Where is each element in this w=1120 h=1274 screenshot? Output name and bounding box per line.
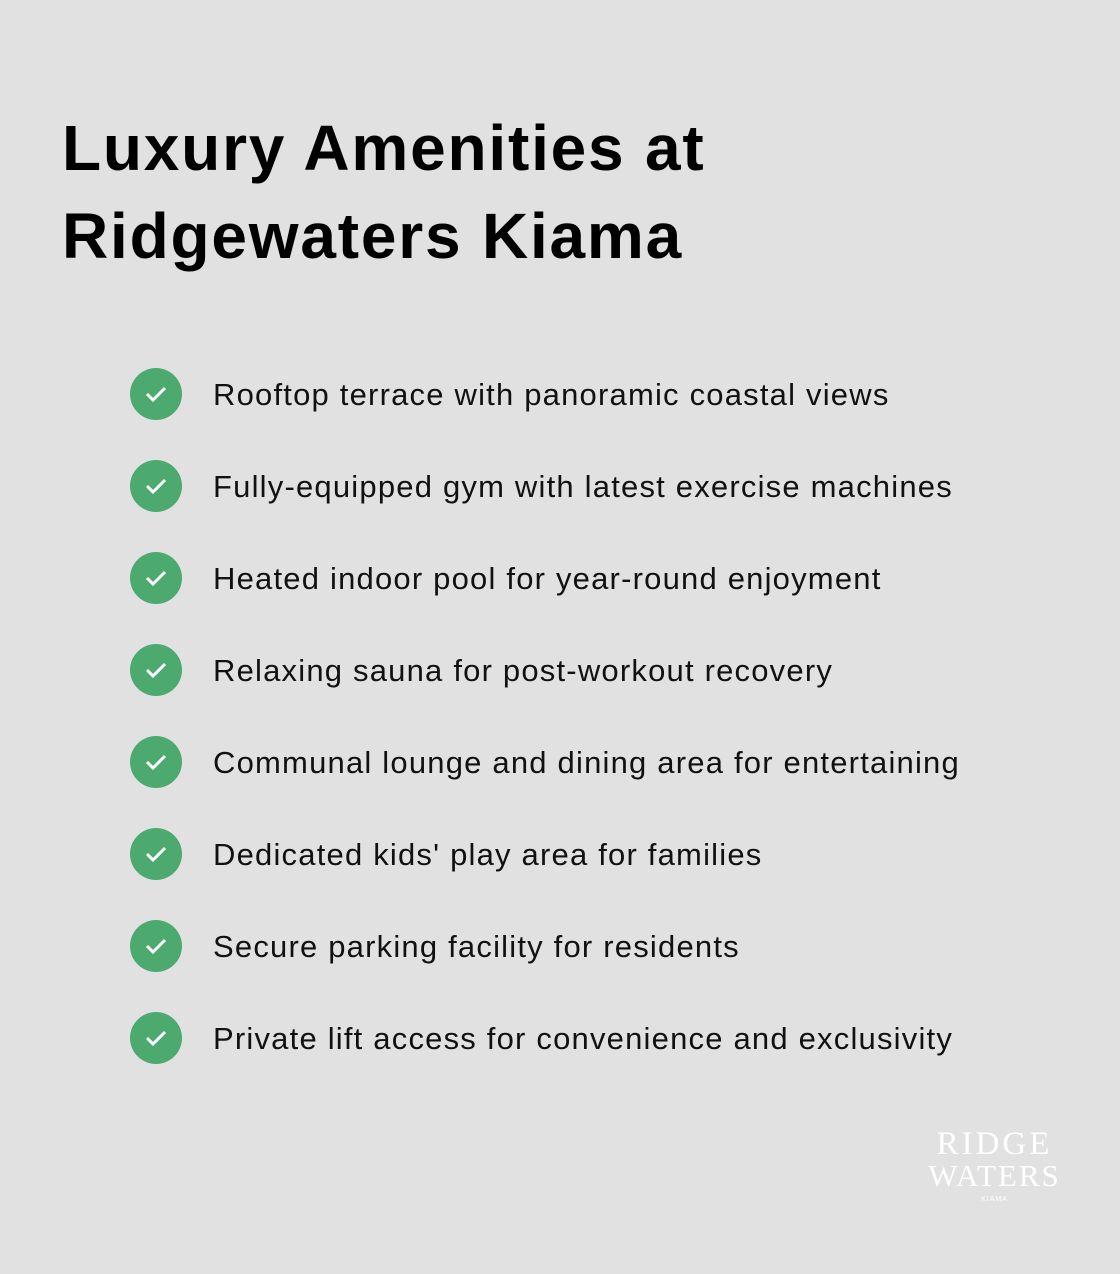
- item: sauna: Relaxing sauna for post-workout recovery: [213, 653, 833, 688]
- logo: WATERS: [928, 1158, 1061, 1193]
- item: pool: Heated indoor pool for year-round enjoyment: [213, 561, 882, 596]
- item: lounge: Communal lounge and dining area for entertaining: [213, 745, 960, 780]
- item: lounge: [130, 736, 960, 788]
- item: rooftop: [130, 368, 890, 420]
- item: gym: Fully-equipped gym with latest exercise machines: [213, 469, 953, 504]
- item: parking: [130, 920, 740, 972]
- item: pool: [130, 552, 882, 604]
- logo: [928, 1126, 1061, 1203]
- item: lift: [130, 1012, 953, 1064]
- item: gym: [130, 460, 953, 512]
- title: Ridgewaters Kiama: [62, 200, 683, 272]
- logo: RIDGE: [937, 1126, 1052, 1162]
- item: kids: [130, 828, 762, 880]
- logo: KIAMA: [981, 1196, 1008, 1203]
- item: rooftop: Rooftop terrace with panoramic coastal views: [213, 377, 890, 412]
- title: [62, 112, 706, 272]
- item: sauna: [130, 644, 833, 696]
- item: parking: Secure parking facility for residents: [213, 929, 740, 964]
- item: lift: Private lift access for convenience and exclusivity: [213, 1021, 953, 1056]
- title: Luxury Amenities at: [62, 112, 706, 184]
- item: kids: Dedicated kids' play area for families: [213, 837, 762, 872]
